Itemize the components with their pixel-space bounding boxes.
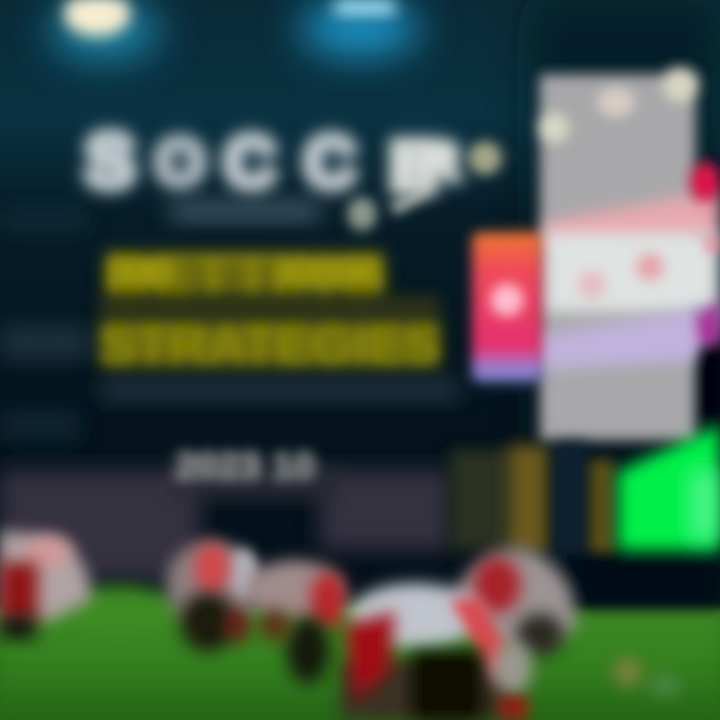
pitch [0,586,720,720]
ball centre left [166,541,258,652]
title: Strategies: STRATEGIES [100,315,440,375]
betting card band [540,162,720,418]
soccer balls [0,530,575,720]
title top line: E [390,127,436,205]
ball left [0,530,91,640]
date text: 2023 10 [175,445,315,486]
red app tag [472,232,542,382]
title top line: C [304,123,356,203]
title top line: S [85,119,135,204]
ball right [450,549,575,657]
title top line [85,119,502,231]
ball centre [245,560,346,684]
green panel [560,425,720,610]
title top line: R [422,133,458,189]
floodlights [50,0,420,60]
title top line: O [155,126,205,198]
phone screen [539,68,697,440]
ball front [340,583,532,720]
title top line: C [224,123,276,203]
pitch marker [614,657,681,697]
title: Betting: BETTING [105,247,385,305]
stadium posts [450,440,614,565]
